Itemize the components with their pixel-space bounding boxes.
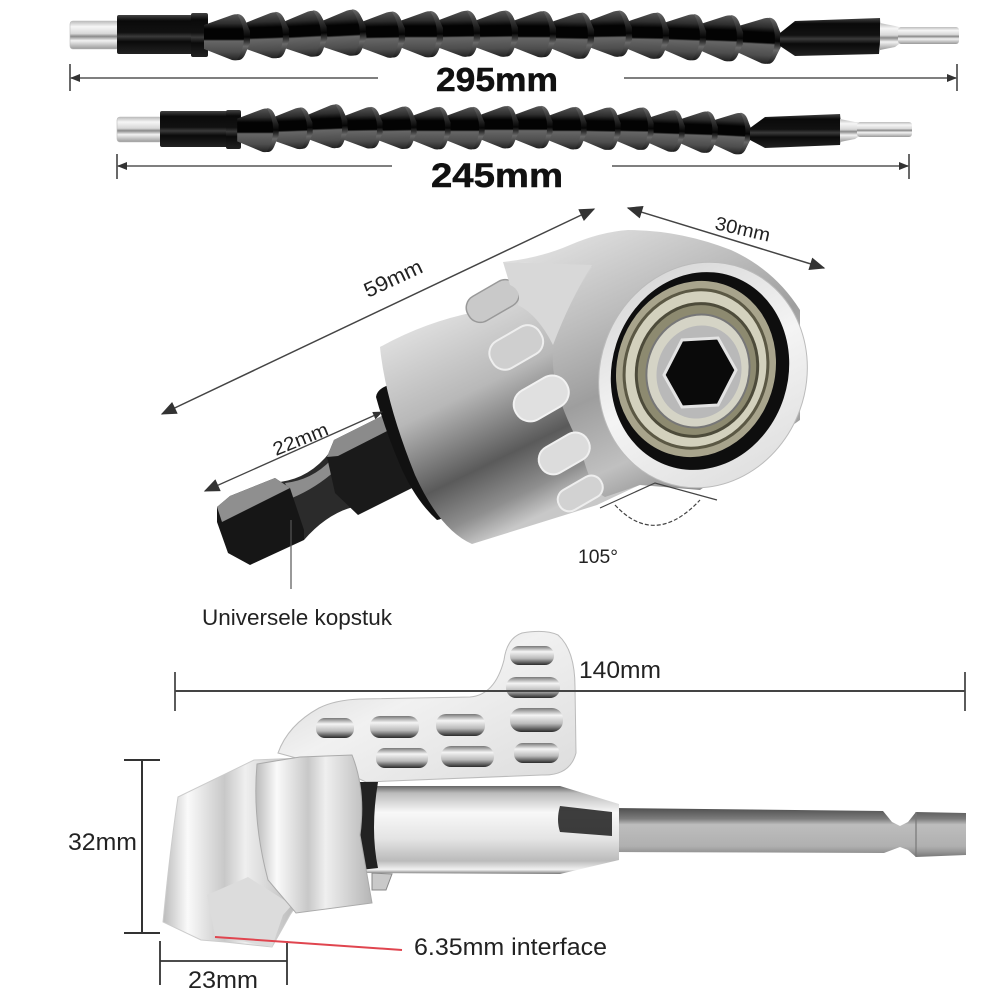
- label 105 degrees: 105°: [578, 547, 618, 568]
- arrow 59mm: [162, 209, 594, 414]
- label 32mm: 32mm: [68, 829, 137, 856]
- left black collar: [191, 13, 208, 57]
- drive collar: [645, 314, 753, 430]
- label 6.35mm interface: 6.35mm interface: [414, 934, 607, 961]
- right silver collar: [840, 119, 858, 142]
- tube nose shadow: [558, 806, 612, 836]
- left black sleeve: [117, 15, 193, 54]
- collar plate highlight: [503, 262, 592, 345]
- rotating collar: [256, 755, 372, 913]
- arrow 22mm: [205, 412, 382, 491]
- label 23mm: 23mm: [188, 967, 258, 994]
- angle adapter, front view: [217, 230, 839, 565]
- hex socket: [664, 338, 736, 407]
- arrow 30mm: [628, 208, 824, 268]
- label 140mm: 140mm: [579, 657, 661, 684]
- right silver collar: [880, 23, 899, 50]
- silver body: [380, 262, 650, 544]
- handle slots: [316, 646, 563, 768]
- label 30mm: 30mm: [713, 213, 772, 246]
- hex bit neck: [280, 452, 362, 540]
- inner race: [632, 301, 764, 441]
- right black sleeve: [780, 18, 880, 56]
- fourth grip slot: [534, 427, 595, 479]
- socket face: [207, 877, 292, 947]
- caption: Universele kopstuk: [202, 605, 393, 630]
- shank tip seam: [915, 812, 917, 857]
- chain of cone segments: [237, 104, 752, 155]
- dimension 32mm: [68, 760, 160, 933]
- shank highlight: [327, 412, 397, 457]
- silver face ring: [567, 233, 839, 517]
- hex bit tip: [217, 478, 304, 565]
- silver tube: [366, 786, 619, 874]
- bearing shield: [604, 271, 788, 467]
- hex bit highlight: [217, 478, 290, 522]
- black gasket: [585, 249, 815, 493]
- left silver tip: [117, 117, 162, 142]
- hex shank: [327, 412, 432, 515]
- label 22mm: 22mm: [270, 419, 332, 461]
- dimension line 245mm: [117, 154, 909, 195]
- handle plate: [278, 631, 576, 782]
- third grip slot: [508, 370, 575, 427]
- chain of cone segments: [204, 9, 782, 65]
- fifth grip slot: [554, 471, 607, 515]
- label 59mm: 59mm: [360, 255, 426, 303]
- label 295mm: 295mm: [436, 61, 558, 98]
- bearing groove: [619, 288, 775, 452]
- neck highlight: [285, 460, 336, 498]
- flexible shaft 295mm: [70, 9, 959, 65]
- dark joint: [356, 782, 378, 870]
- hex shank: [612, 808, 966, 857]
- head elbow: [163, 758, 300, 947]
- dimension line 140mm: [175, 657, 965, 711]
- label 245mm: 245mm: [431, 157, 563, 195]
- dimension line 295mm: [70, 61, 957, 98]
- head bend: [503, 230, 800, 497]
- left black collar: [226, 110, 241, 149]
- angle adapter, side view: [163, 631, 966, 947]
- flexible shaft 245mm: [117, 104, 912, 155]
- grip finger upper: [461, 275, 524, 327]
- right black sleeve: [750, 114, 841, 148]
- red interface callout: [215, 934, 607, 961]
- black washer: [376, 384, 452, 520]
- 105 degree angle marker: [578, 483, 717, 568]
- small collar notch: [372, 873, 392, 890]
- right silver tip: [857, 122, 912, 137]
- right silver tip: [898, 27, 959, 44]
- left silver tip: [70, 21, 119, 49]
- second grip slot: [484, 320, 548, 375]
- bearing outer race: [593, 260, 799, 478]
- dimension 23mm: [160, 941, 287, 994]
- left black sleeve: [160, 111, 228, 147]
